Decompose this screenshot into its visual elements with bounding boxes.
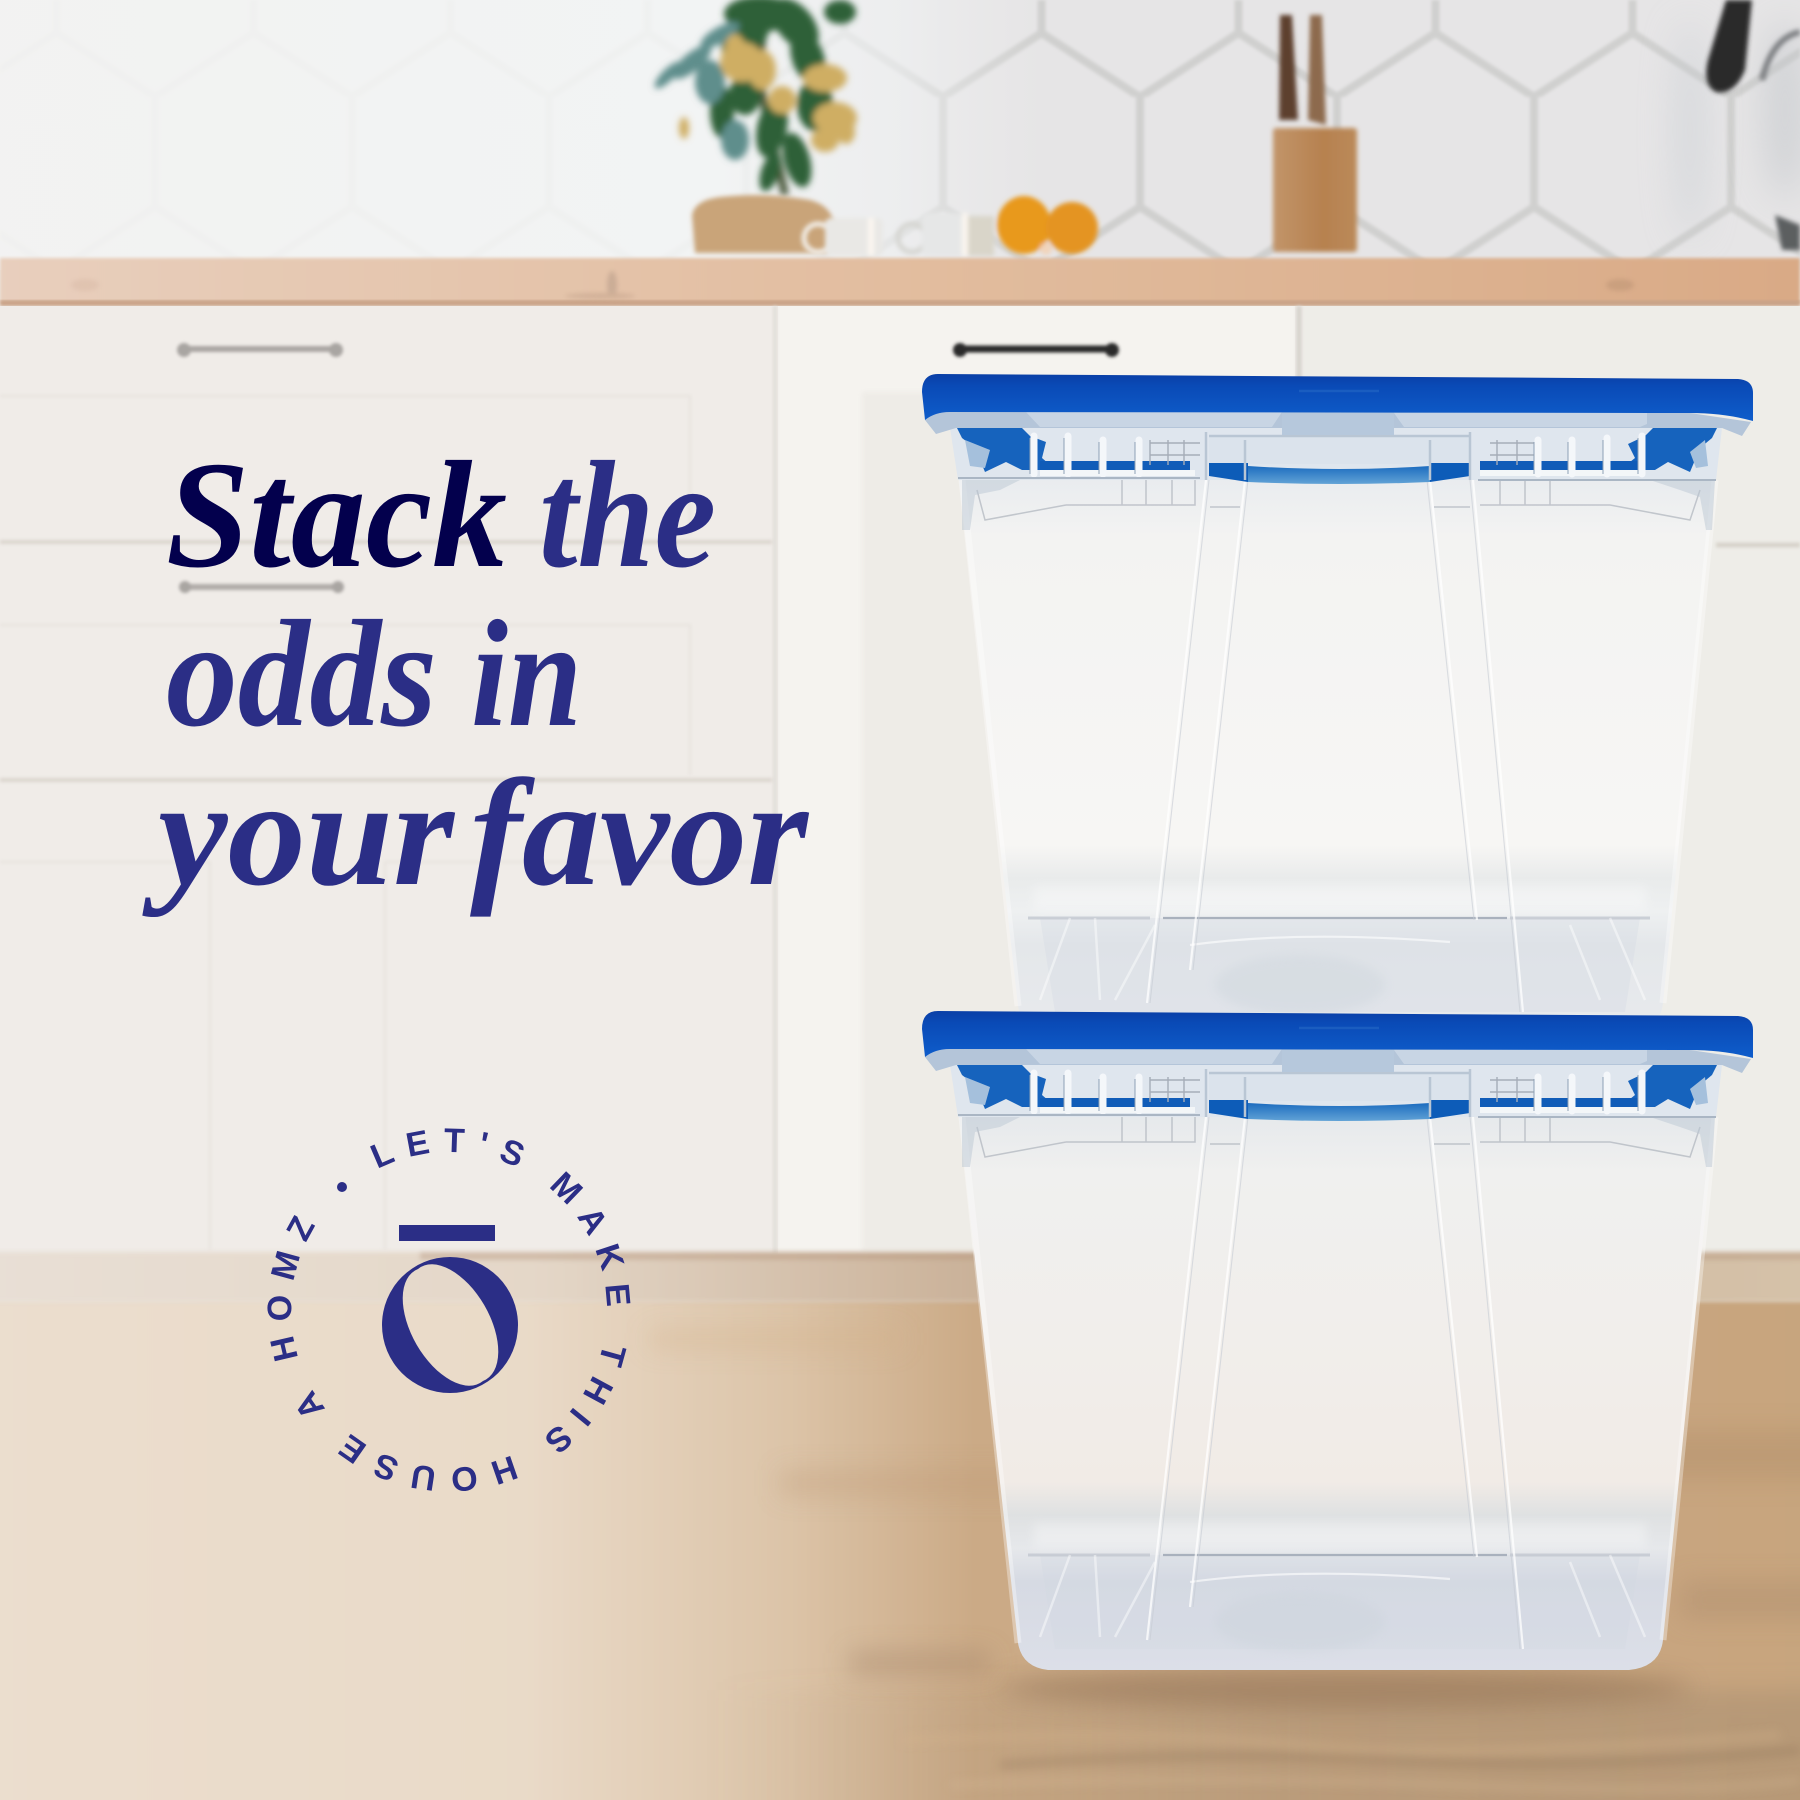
icon: knife block	[1273, 15, 1357, 252]
headline word: odds: odds	[166, 590, 437, 759]
headline word: in: in	[471, 590, 582, 759]
cabinets	[0, 306, 1800, 1254]
icon: potted plant	[651, 0, 857, 253]
wood floor	[0, 1300, 1800, 1800]
logo ring	[382, 1257, 518, 1393]
circular slogan text: LET'S MAKE THIS HOUSE A HOMZ	[267, 1128, 630, 1491]
logo bar	[399, 1225, 495, 1241]
lower storage container with blue lid	[922, 1011, 1753, 1670]
icon: faucet	[1706, 0, 1800, 250]
countertop	[0, 258, 1800, 306]
icon: mugs and oranges	[804, 196, 1098, 256]
container body: upper	[959, 480, 1715, 1033]
background: kitchen wall with hexagon tiles	[0, 0, 1800, 270]
headline: Stack the odds in your favor	[142, 431, 809, 918]
headline word: the: the	[539, 431, 716, 600]
badge: circular logo	[267, 1128, 630, 1491]
container body: lower	[959, 1117, 1715, 1670]
upper storage container	[922, 374, 1753, 1033]
baseboard	[0, 1252, 1800, 1302]
headline word: your: your	[142, 749, 455, 918]
dot separator	[337, 1182, 347, 1192]
headline word: Stack: Stack	[166, 431, 507, 600]
headline word: favor: favor	[470, 749, 809, 918]
cabinet handles	[177, 343, 1119, 593]
